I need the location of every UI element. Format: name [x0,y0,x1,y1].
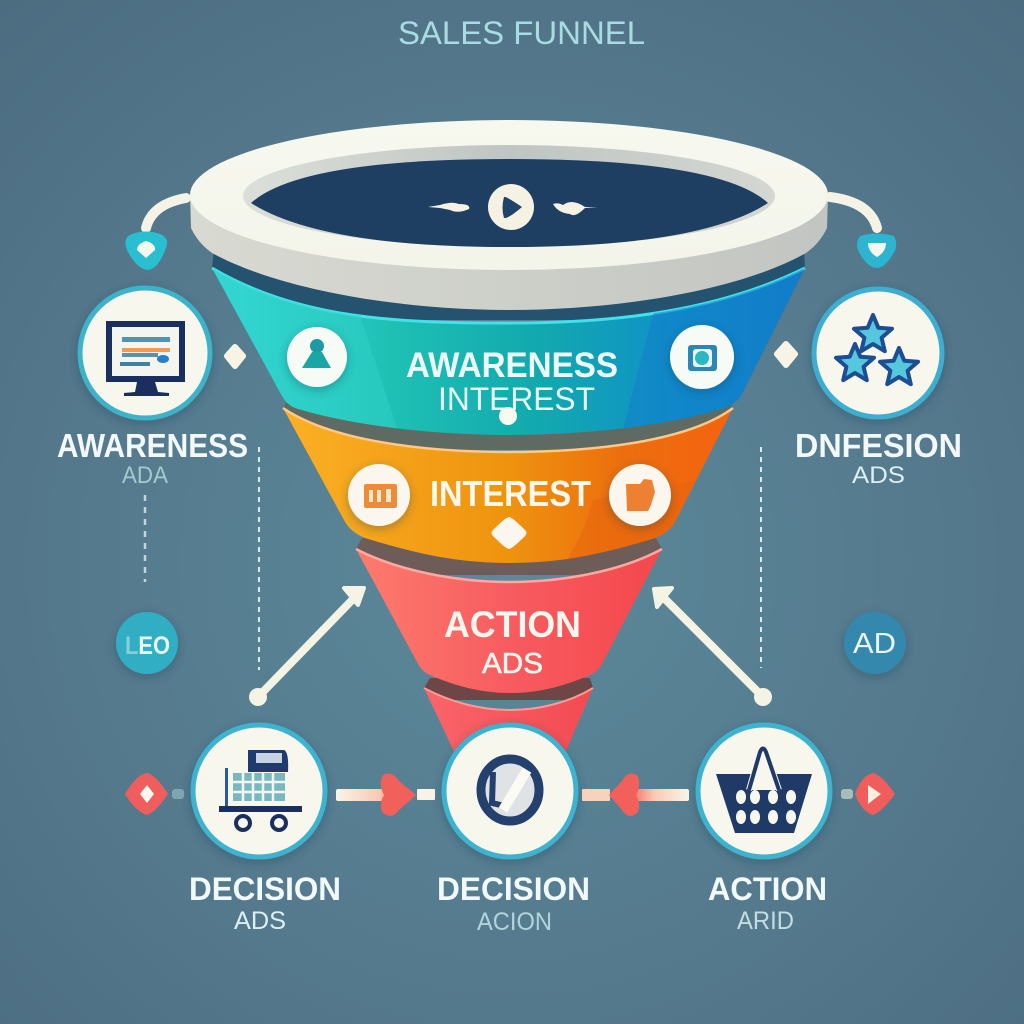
caption: ACION [477,908,552,936]
monitor badge [80,288,210,418]
awareness icon left [287,327,347,387]
title: SALES FUNNEL [398,15,645,51]
connector: left pin [125,773,184,815]
awareness heading: AWARENESS [57,427,248,464]
panel: right decision [795,289,962,489]
awareness caption: ADA [122,462,168,489]
interest sublabel: INTEREST [438,381,595,417]
panel: basket action [698,725,830,935]
arrow: right diagonal [654,588,772,706]
badge: LEO [116,612,178,674]
right caption: ADS [852,462,905,489]
stars badge [814,289,942,417]
check badge [444,725,576,857]
interest icon right [609,464,671,526]
action sublabel: ADS [482,648,543,680]
heading: ACTION [708,871,827,907]
awareness icon right [670,325,734,389]
tail segment [424,678,593,760]
left diamond [227,347,243,366]
heading: DECISION [189,871,341,907]
awareness dot [499,407,517,425]
dotted guide left outer [144,495,146,582]
connector: right pin [841,773,895,815]
arrow: left diagonal [249,588,364,706]
basket badge [698,725,830,857]
funnel [190,120,828,760]
badge: AD: AD [853,628,896,660]
awareness segment [200,250,820,440]
right diamond [777,344,795,365]
interest icon left [348,464,410,526]
right hook connector [830,197,896,268]
panel: check decision [437,725,590,936]
dotted guide right [760,447,762,668]
interest label: INTEREST [430,473,591,514]
awareness label: AWARENESS [406,346,618,385]
funnel rim [190,120,828,310]
dotted guide left inner [258,447,260,670]
badge: LEO: LEO [125,632,170,660]
right heading: DNFESION [795,427,962,464]
play icon [428,184,597,230]
cart badge [193,725,325,857]
left hook connector [125,198,186,270]
interest diamond [492,517,526,549]
action label: ACTION [444,604,581,645]
heading: DECISION [437,871,590,907]
panel: awareness [57,288,248,489]
funnel opening [251,159,768,247]
caption: ARID [737,907,794,935]
arrow: basket to check [582,773,689,816]
caption: ADS [234,907,286,935]
panel: cart decision [189,725,341,935]
interest segment [283,396,733,570]
action segment [356,538,662,693]
badge: AD [844,612,906,674]
arrow: cart to check [336,773,435,816]
